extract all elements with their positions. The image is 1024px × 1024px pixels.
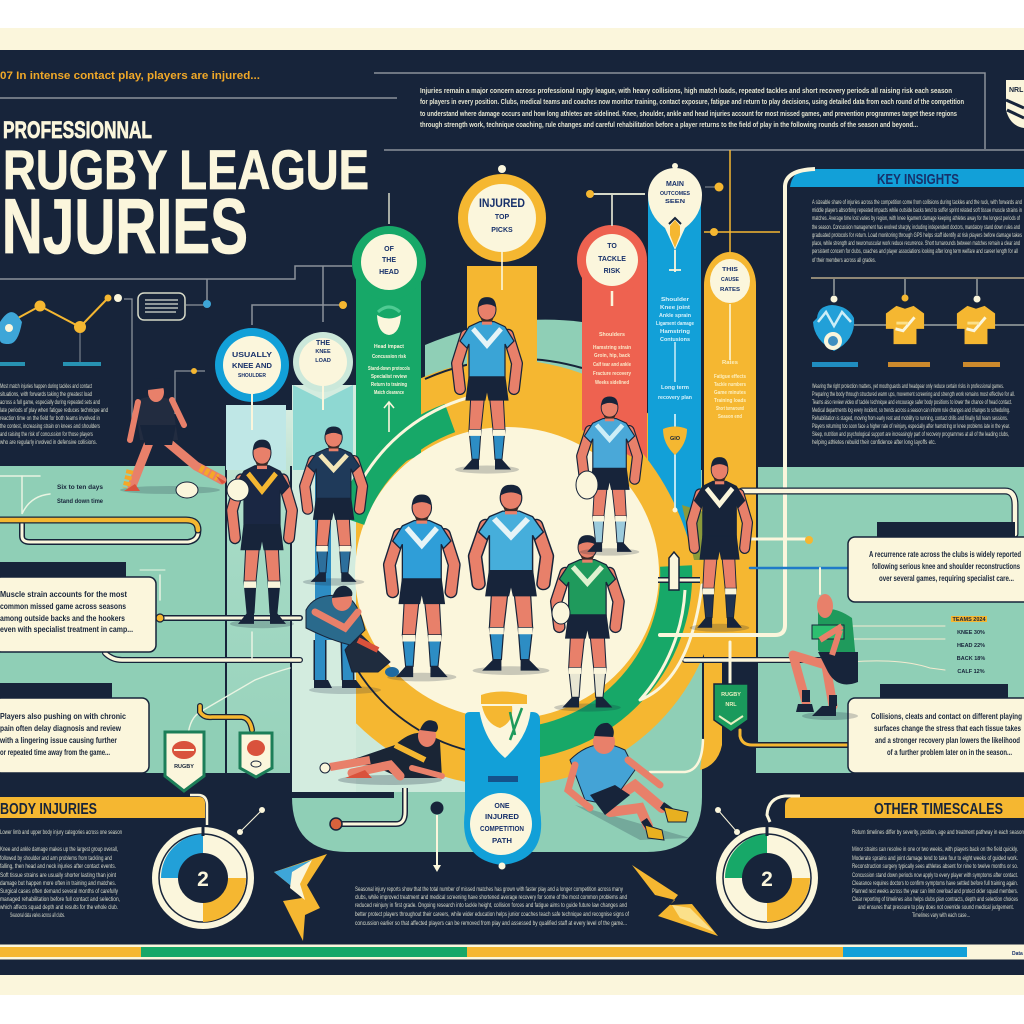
legend list: BACK 18%: [957, 656, 985, 662]
icon: red shield left: RUGBY: [174, 764, 194, 770]
panel: key insights: [785, 169, 1024, 465]
panel: right teal area: [756, 467, 1024, 773]
icon: green shield: NRL: [725, 702, 737, 708]
legend list: KNEE 30%: [957, 630, 985, 636]
callout: pale circle: THE: [316, 340, 330, 347]
icon: league badge: NRL: [1009, 87, 1024, 94]
callout: red pillar: Calf tear and ankle: [593, 362, 631, 368]
navy foot bar: [292, 792, 394, 798]
callout: yellow pillar: Fatigue effects: [714, 374, 746, 380]
callout: blue pillar: Ankle sprain: [659, 313, 692, 319]
player: crouching holding knee: [306, 586, 399, 694]
left pipe labels: Six to ten days: [57, 484, 103, 491]
left callout one: even with specialist treatment in camp...: [0, 625, 133, 634]
bottom left text block: Soft tissue strains are usually shorter lasting than joint: [0, 873, 116, 879]
divider lines and intro frame: [0, 73, 1024, 325]
callout: blue pillar: [648, 163, 702, 512]
player: top centre blue: [455, 297, 519, 474]
key insights lower text: [812, 384, 1015, 446]
icon: blue jersey: [813, 305, 854, 351]
bottom centre text block: concussion earlier so that affected players can be removed from play and assessed by qualified staff at every level of the game...: [355, 921, 627, 927]
concentric ring: yellow: [294, 360, 720, 786]
legend list: CALF 12%: [957, 669, 985, 675]
callout: red pillar: RISK: [604, 268, 620, 275]
jersey labels: [812, 362, 1000, 367]
left text block: the contest, increasing strain on knees and shoulders: [0, 424, 100, 430]
panel: central teal area: [226, 470, 702, 852]
legend list: TEAMS 2024: [952, 617, 986, 623]
bottom centre text block: better protect players throughout their careers, while wider education helps junior coaches teach safe technique and recognise signs of: [355, 912, 629, 918]
callout: red pillar: Hamstring strain: [593, 345, 632, 351]
left text block: reaction time on the field for both teams involved in: [0, 416, 100, 422]
title: [0, 117, 369, 270]
yellow wedge over blue column: [640, 450, 696, 570]
callout: blue circle: SHOULDER: [238, 373, 266, 379]
callout: red pillar: [577, 225, 647, 386]
central cream circle: [355, 427, 659, 719]
callout: red pillar: Weeks sidelined: [595, 380, 629, 386]
player: sitting blue holding leg: [568, 723, 690, 840]
left text block: who are regularly involved in defensive collisions.: [0, 440, 97, 446]
left text block: situations, with forwards taking the greatest load: [0, 392, 92, 398]
intro text block: Injuries remain a major concern across professional rugby league, with heavy collisions, high match loads, repeated tackles and short recovery periods all raising risk each season: [420, 88, 952, 95]
callout: red pillar: Shoulders: [599, 332, 625, 338]
title: RUGBY LEAGUE: [3, 138, 369, 201]
bottom left text block: falling, then head and neck injuries after contact events.: [0, 864, 116, 870]
donut chart left: 2: [197, 868, 209, 891]
player: right dark: [690, 457, 749, 632]
blue column: [226, 405, 286, 470]
icon: green shield: RUGBY: [721, 692, 741, 698]
bottom centre text block: [355, 887, 629, 927]
callout: blue pillar: Hamstring: [660, 329, 690, 335]
left text block: late periods of play when fatigue reduces technique and: [0, 408, 108, 414]
callout: red pillar: Fracture recovery: [593, 371, 632, 377]
icon: red shield left: [165, 732, 204, 791]
callout: yellow pillar: Training loads: [714, 398, 746, 404]
callout: blue pillar: Long term: [661, 385, 689, 391]
heading bar left: [0, 795, 207, 825]
callout: yellow pillar: THIS: [722, 267, 738, 273]
player: centre blue: [473, 485, 549, 675]
left text block: [0, 384, 108, 446]
callout: green pillar: THE: [382, 257, 396, 264]
concentric ring: outer teal: [425, 320, 582, 380]
panel: left teal area: [0, 466, 226, 773]
yellow tall column: [700, 285, 756, 770]
left pipe labels: Stand down time: [57, 498, 103, 505]
callout: blue pillar: SEEN: [665, 199, 685, 205]
panel: blue bottom column: PATH: [492, 838, 512, 845]
key insights lower text: helping athletes rebuild their confidence after long layoffs etc.: [812, 440, 936, 446]
callout: blue circle: [215, 328, 289, 430]
player: green: [552, 535, 621, 712]
bottom left text block: Knee and ankle damage makes up the largest group overall,: [0, 847, 118, 853]
heading bar right: [767, 796, 1024, 822]
icon: yellow jersey one: [886, 306, 924, 344]
callout: green pillar: OF: [384, 246, 395, 253]
callout: green pillar: HEAD: [379, 269, 399, 276]
bottom left text block: followed by shoulder and arm problems from tackling and: [0, 856, 112, 862]
icon: green shield: [714, 684, 748, 732]
right callout two: [848, 684, 1024, 773]
player: centre left blue: [387, 495, 456, 681]
left text block: Most match injuries happen during tackles and contact: [0, 384, 92, 390]
panel: blue bottom column: [464, 712, 541, 870]
pale lower ground: [292, 680, 470, 792]
bottom colour bar: [0, 944, 1024, 960]
icon: league badge: [1006, 80, 1024, 128]
bottom left text block: Seasonal data varies across all clubs.: [10, 913, 65, 919]
bottom colour bar: Data: [1012, 951, 1023, 957]
callout: blue pillar: GIO: [670, 436, 681, 442]
title: PROFESSIONNAL: [3, 117, 152, 144]
bottom left text block: managed rehabilitation before full contact and selection,: [0, 897, 120, 903]
bottom right text block: [852, 830, 1024, 919]
green column: [356, 262, 421, 500]
icon: lightning right: [632, 865, 718, 936]
legend list: HEAD 22%: [957, 643, 985, 649]
bottom left text block: damage but happen more often in training and matches.: [0, 881, 116, 887]
bottom left text block: Lower limb and upper body injury categories across one season: [0, 830, 122, 836]
legend list: [951, 616, 987, 675]
left callout two: or repeated time away from the game...: [0, 748, 110, 757]
callout: green pillar: Stand-down protocols: [368, 366, 410, 372]
left callout one: common missed game across seasons: [0, 602, 126, 611]
callout: red pillar: Groin, hip, back: [594, 353, 631, 359]
callout: red pillar: TACKLE: [598, 256, 626, 263]
right callout one: [848, 522, 1024, 602]
blue ribbon behind player: [315, 470, 340, 640]
left callout two: [0, 683, 149, 773]
left callout one: Muscle strain accounts for the most: [0, 590, 127, 599]
callout: yellow pillar: Tackle numbers: [714, 382, 746, 388]
connector dot left: [156, 614, 164, 622]
pipe network left: [0, 476, 300, 735]
player: left dark and yellow: [227, 440, 294, 628]
callout: green pillar: Return to training: [371, 382, 407, 388]
callout: blue pillar: OUTCOMES: [660, 191, 690, 197]
callout: yellow pillar: Game minutes: [714, 390, 746, 396]
callout: blue pillar: Ligament damage: [656, 321, 694, 327]
callout: green pillar: Concussion risk: [372, 354, 407, 360]
pipe: bottom left of centre: [330, 788, 405, 830]
callout: green pillar: [352, 193, 426, 432]
ring outline: [425, 359, 582, 379]
green ring arcs: [350, 398, 685, 744]
callout: red pillar: TO: [607, 243, 617, 250]
callout: yellow pillar: RATES: [720, 287, 740, 293]
callout: blue pillar: Contusions: [660, 337, 690, 343]
bottom centre text block: reduced reinjury in first grade. Ongoing research into tackle height, collision forces and fatigue aims to guide future law changes and: [355, 903, 627, 909]
connector dot right: [805, 536, 813, 544]
donut chart right: 2: [761, 868, 773, 891]
callout: blue pillar: recovery plan: [658, 395, 693, 401]
player: right rear blue: [576, 396, 639, 556]
donut chart left: [152, 807, 265, 929]
callout: green pillar: Head impact: [374, 344, 404, 350]
callout: blue pillar: Shoulder: [661, 297, 690, 303]
intro text block: through strength work, technique coaching, rule changes and careful rehabilitation before a player returns to the field of play in the following rounds of the season and beyond...: [420, 122, 918, 129]
left callout two: Players also pushing on with chronic: [0, 712, 126, 721]
bottom left text block: [0, 830, 122, 919]
callout: blue pillar: MAIN: [666, 181, 684, 188]
pale column strip: [226, 410, 292, 773]
donut chart right: [715, 807, 818, 929]
callout: green pillar: Match clearance: [374, 390, 404, 396]
blue tall column: [648, 195, 701, 560]
green shade: [682, 505, 704, 560]
bottom right text block: Timelines vary with each case...: [912, 913, 970, 919]
panel: blue bottom column: ONE: [494, 803, 510, 810]
player: seated green: [793, 594, 858, 720]
callout: pale circle: [293, 332, 353, 410]
callout: yellow pillar: Season end: [718, 414, 742, 420]
heading bar left: BODY INJURIES: [0, 801, 97, 818]
callout: top yellow circle: INJURED: [479, 196, 525, 210]
left callout one: [0, 562, 156, 652]
player: kneeling kicker: [120, 378, 226, 498]
left callout two: pain often delay diagnosis and review: [0, 724, 122, 733]
bottom centre text block: Seasonal injury reports show that the total number of missed matches has grown with faster play and a longer competition across many: [355, 887, 623, 893]
bottom centre text block: clubs, while improved treatment and medical screening have shortened average recovery for some of the most common problems and: [355, 895, 627, 901]
callout: blue pillar: Knee joint: [660, 305, 690, 311]
connector lines top right: [175, 150, 780, 414]
icon: red shield right: [240, 733, 272, 777]
pale column top: [293, 385, 353, 470]
player: dark and blue: [303, 426, 364, 586]
pipe: ring clamp: [658, 552, 700, 590]
small legend box: [138, 293, 211, 320]
callout: yellow pillar: Short turnaround: [716, 406, 744, 412]
callout: top yellow circle: PICKS: [491, 227, 513, 234]
panel: blue bottom column: COMPETITION: [480, 826, 524, 833]
icon: lightning left: [274, 854, 327, 941]
callout: green pillar: Specialist review: [371, 374, 408, 380]
bottom left text block: which affects squad depth and results for the whole club.: [0, 905, 118, 911]
callout: blue circle: KNEE AND: [232, 363, 272, 370]
callout: pale circle: KNEE: [315, 349, 331, 355]
line chart: [0, 294, 132, 430]
pale column: second: [292, 385, 356, 792]
intro text block: [420, 88, 964, 129]
callout: blue circle: USUALLY: [232, 352, 272, 359]
panel: key insights: KEY INSIGHTS: [877, 171, 959, 188]
callout: yellow pillar: Rates: [722, 360, 738, 366]
top tagline: 07 In intense contact play, players are injured...: [0, 70, 260, 82]
ring divider lines: [356, 668, 470, 751]
left pipe labels: [57, 484, 103, 505]
callout: pale circle: LOAD: [315, 358, 331, 364]
pipe network right: [640, 465, 1015, 772]
icon: competition shield: [478, 688, 531, 758]
red column: [582, 262, 647, 465]
left callout two: with a lingering issue causing further: [0, 736, 117, 745]
arrow: down marker: [430, 802, 444, 872]
panel: key insights: of their members across all grades.: [812, 258, 876, 264]
left callout one: among outside backs and the hookers: [0, 614, 125, 623]
panel: blue bottom column: INJURED: [485, 814, 519, 821]
left text block: across a full game, especially during repeated sets and: [0, 400, 100, 406]
callout: yellow pillar: [704, 252, 756, 420]
callout: top yellow circle: [458, 165, 546, 290]
left text block: and raising the risk of concussion for those players: [0, 432, 93, 438]
bottom left text block: Surgical cases often demand several months of carefully: [0, 889, 118, 895]
yellow column: [467, 266, 537, 431]
callout: yellow pillar: CAUSE: [721, 277, 739, 283]
navy column dividers: [226, 466, 291, 792]
player: lying on ground: [320, 720, 442, 785]
icon: yellow jersey two: [957, 306, 995, 344]
callout: top yellow circle: TOP: [495, 214, 509, 221]
